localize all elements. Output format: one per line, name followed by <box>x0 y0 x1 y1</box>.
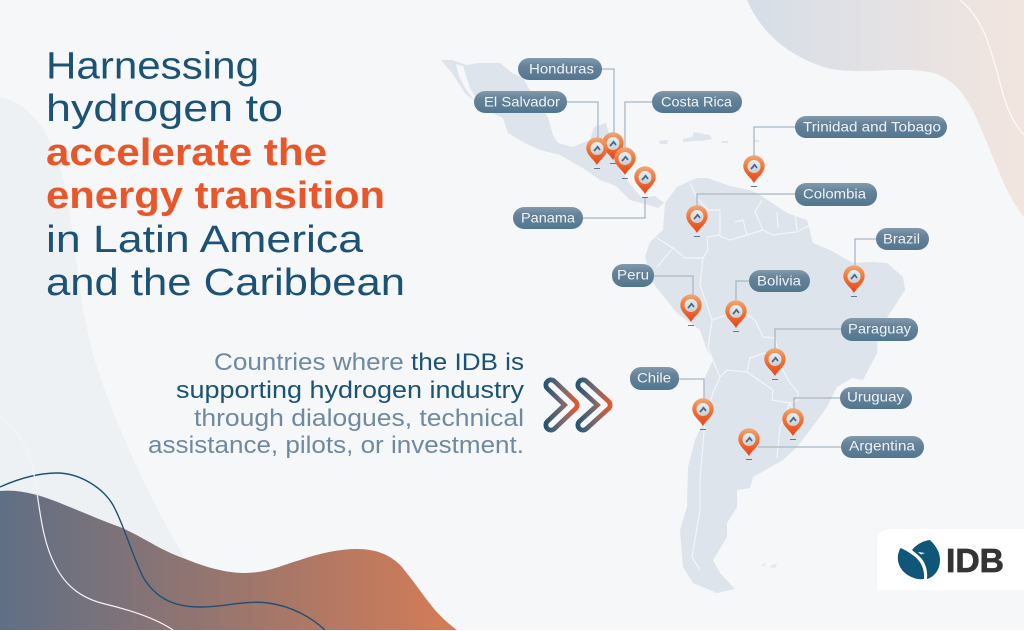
bottom edge <box>0 630 1024 631</box>
label: Peru: Peru <box>617 266 649 282</box>
Caribbean islands <box>659 132 759 144</box>
pin: Bolivia <box>725 300 747 332</box>
white curve <box>0 417 173 630</box>
title <box>46 46 405 304</box>
description text: through dialogues, technical <box>194 405 524 432</box>
bottom-left gradient wave <box>0 491 457 630</box>
label: Argentina: Argentina <box>849 438 915 454</box>
label: Brazil <box>876 228 929 250</box>
map of Latin America <box>441 60 905 593</box>
pin: Paraguay <box>764 348 786 380</box>
globe icon <box>898 540 940 579</box>
pin: Costa Rica <box>614 147 636 179</box>
label: Bolivia <box>749 270 810 292</box>
label: El Salvador <box>474 91 567 113</box>
title: accelerate the <box>46 132 327 174</box>
label: Trinidad and Tobago <box>795 116 947 138</box>
label: Honduras <box>518 58 602 80</box>
map pins <box>586 132 865 460</box>
label: Panama: Panama <box>521 210 575 226</box>
label: Costa Rica: Costa Rica <box>661 94 732 110</box>
logo wordmark: IDB <box>946 542 1004 579</box>
IDB logo <box>877 529 1024 590</box>
top-right gradient shape <box>747 0 1024 217</box>
label: Paraguay <box>841 318 918 341</box>
description text: Countries where the IDB is <box>214 349 524 376</box>
title: Harnessing <box>46 46 259 88</box>
country borders <box>657 183 810 570</box>
label: Chile: Chile <box>637 370 671 386</box>
pin: Brazil <box>843 265 865 297</box>
title: energy transition <box>46 175 385 217</box>
top-right white curve <box>960 0 1024 135</box>
label: Bolivia: Bolivia <box>757 272 801 288</box>
description text: supporting hydrogen industry <box>176 377 524 404</box>
description text: assistance, pilots, or investment. <box>148 432 524 459</box>
label: Costa Rica <box>652 91 742 113</box>
pin: Chile <box>692 398 714 430</box>
pin: Trinidad and Tobago <box>743 155 765 187</box>
label: Argentina <box>841 436 924 458</box>
pin: Peru <box>680 294 702 326</box>
description text <box>148 349 524 459</box>
label: Paraguay: Paraguay <box>848 320 911 336</box>
title: in Latin America <box>46 219 364 261</box>
label: El Salvador: El Salvador <box>484 94 560 110</box>
Falkland Islands <box>761 562 777 568</box>
dark blue curve <box>0 473 325 630</box>
label: Brazil: Brazil <box>883 230 920 246</box>
left pale background shape <box>0 97 186 560</box>
Mexico and Central America <box>441 60 664 208</box>
leader lines <box>567 69 876 447</box>
Gulf of California <box>456 64 480 105</box>
pin: Argentina <box>738 428 760 460</box>
pin: Panama <box>634 166 656 198</box>
logo panel <box>877 529 1024 590</box>
label: Colombia: Colombia <box>803 186 866 202</box>
pin: El Salvador <box>586 137 608 169</box>
pin: Honduras <box>602 132 624 164</box>
label: Panama <box>513 207 583 229</box>
pin: Uruguay <box>782 408 804 440</box>
label: Uruguay: Uruguay <box>847 388 904 404</box>
title: hydrogen to <box>46 88 283 130</box>
label: Trinidad and Tobago: Trinidad and Tobago <box>803 118 941 134</box>
label: Chile <box>630 367 679 390</box>
South America <box>645 178 905 593</box>
label: Peru <box>612 264 654 287</box>
label: Honduras: Honduras <box>529 60 594 76</box>
icon: double chevron arrow <box>551 385 605 425</box>
pin: Colombia <box>686 205 708 237</box>
label: Uruguay <box>840 387 912 409</box>
title: and the Caribbean <box>46 262 405 304</box>
label: Colombia <box>795 183 877 206</box>
